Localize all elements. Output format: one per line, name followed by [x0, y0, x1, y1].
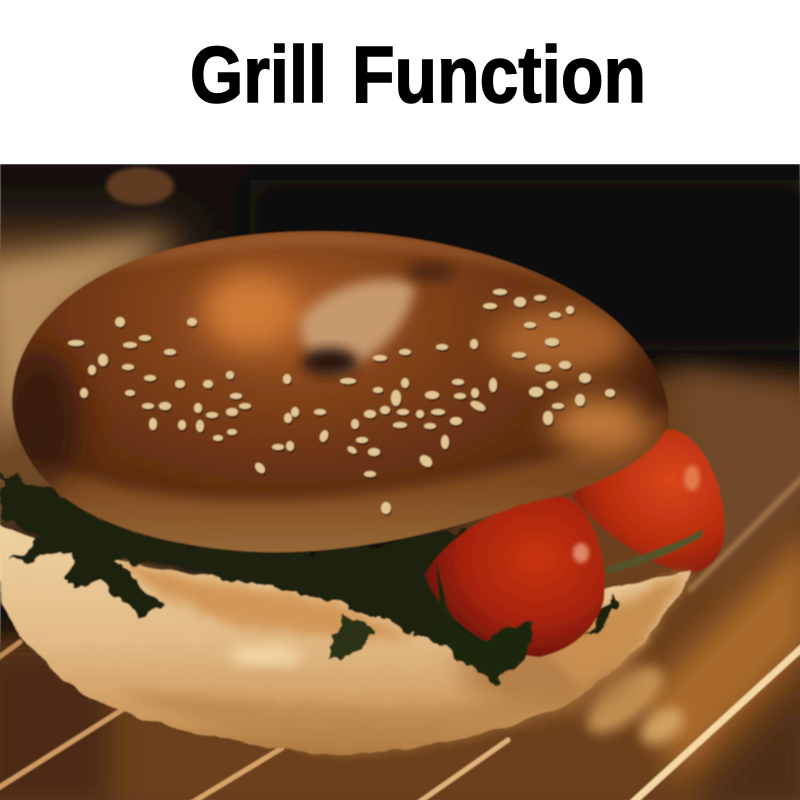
- oven background: [0, 164, 800, 800]
- greens: [0, 472, 703, 682]
- oven rack wires: [0, 475, 800, 800]
- sesame seed shadows: [69, 291, 616, 516]
- front tomato: [425, 497, 605, 682]
- bottom bun: [0, 525, 690, 755]
- title: Grill: [190, 30, 327, 119]
- sesame seeds: [68, 289, 615, 514]
- back tomato: [572, 430, 725, 573]
- title: [190, 30, 646, 119]
- photo: bagel sandwich on oven rack: [0, 164, 800, 800]
- title: Function: [352, 30, 646, 119]
- top bagel crust: [0, 231, 670, 570]
